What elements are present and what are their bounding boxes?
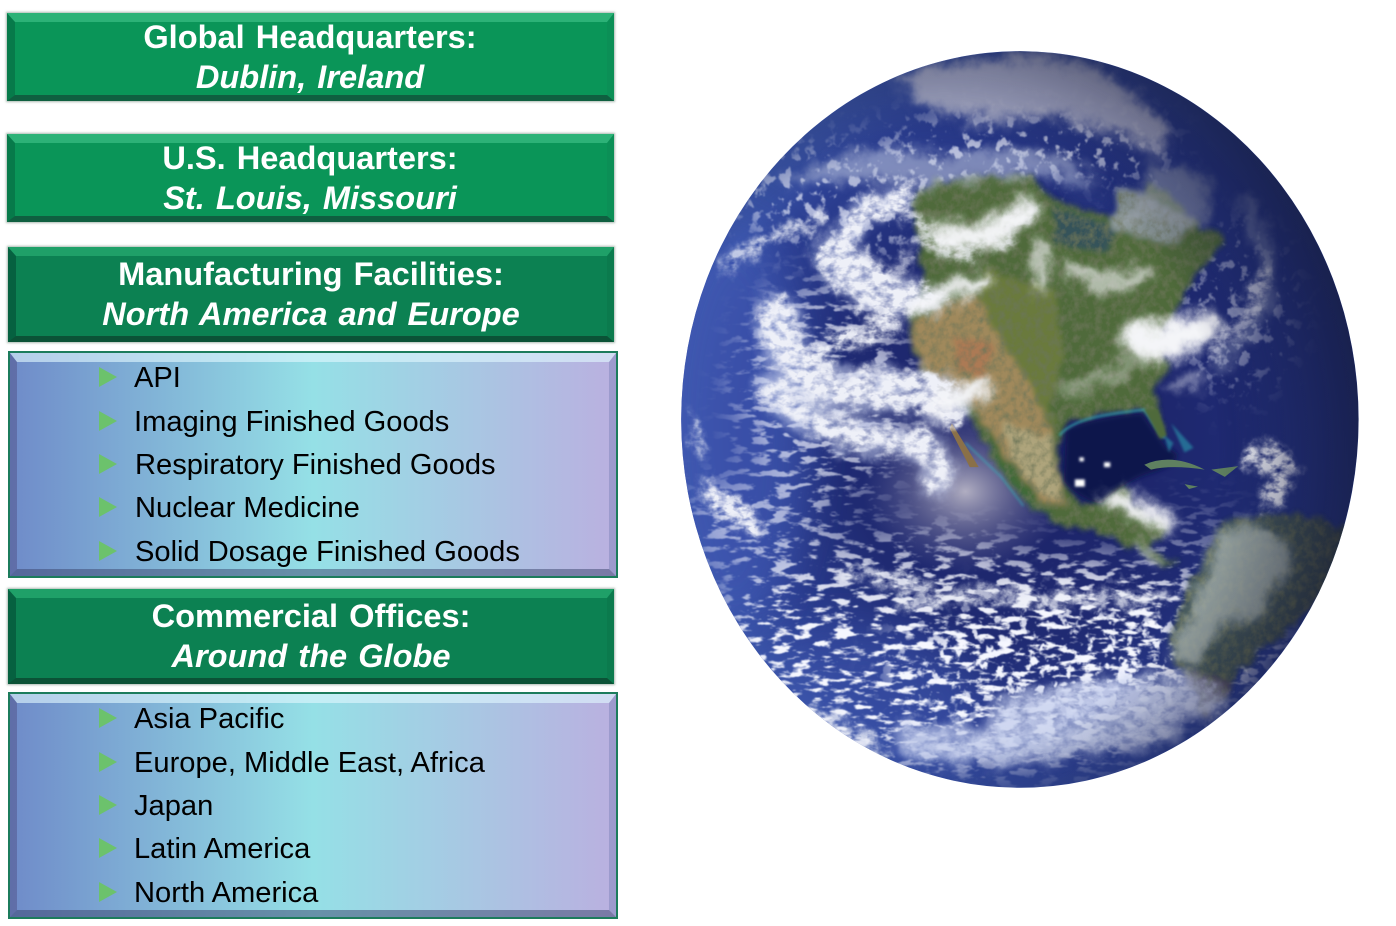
list item: Japan: Japan bbox=[134, 790, 213, 822]
box: U.S. headquarters bbox=[7, 134, 614, 222]
heading: commercial offices: Commercial Offices: bbox=[152, 597, 470, 634]
baja california bbox=[950, 424, 979, 468]
list item: respiratory: Respiratory Finished Goods bbox=[135, 449, 496, 481]
soft swirl underlayer bbox=[773, 200, 1202, 747]
south america clouds bbox=[1169, 521, 1296, 672]
icon: globe showing the Americas bbox=[681, 51, 1359, 788]
box: global headquarters bbox=[7, 13, 614, 101]
list item: imaging: Imaging Finished Goods bbox=[134, 406, 449, 438]
heading: U.S. headquarters: U.S. Headquarters: bbox=[162, 139, 458, 176]
gulf coast glow bbox=[1059, 410, 1164, 438]
hudson bay bbox=[1055, 171, 1113, 210]
list item: solid dosage: Solid Dosage Finished Goods bbox=[135, 536, 520, 568]
list item: EMEA: Europe, Middle East, Africa bbox=[134, 747, 485, 779]
list item: North America: North America bbox=[134, 877, 318, 909]
panel: commercial list bbox=[8, 692, 618, 919]
south america bbox=[1167, 514, 1350, 721]
list item: API bbox=[99, 362, 181, 394]
florida bbox=[1144, 409, 1167, 439]
list item: API: API bbox=[134, 362, 181, 394]
list item: Latin America: Latin America bbox=[134, 833, 310, 865]
heading: U.S. headquarters bbox=[162, 139, 458, 216]
speckled clouds bbox=[687, 252, 1298, 788]
list item: nuclear medicine: Nuclear Medicine bbox=[135, 492, 360, 524]
panel: manufacturing list bbox=[8, 351, 618, 578]
heading: global headquarters: Dublin, Ireland bbox=[196, 58, 424, 95]
sun glint bbox=[872, 420, 1048, 566]
heading: manufacturing facilities: Manufacturing Facilities: bbox=[118, 255, 504, 292]
ocean bbox=[670, 39, 1368, 798]
heading: manufacturing facilities: North America and Europe bbox=[102, 295, 520, 332]
gulf stars of cloud bbox=[1075, 458, 1110, 487]
storm swirl clouds bbox=[692, 200, 1281, 747]
heading: commercial offices bbox=[152, 597, 470, 674]
limb light and terminator shading bbox=[681, 52, 1359, 788]
gulf of mexico bbox=[1064, 413, 1177, 504]
caribbean islands bbox=[1144, 460, 1238, 489]
list item: Japan bbox=[99, 790, 213, 822]
heading: global headquarters: Global Headquarters: bbox=[143, 18, 477, 55]
list item: Asia Pacific: Asia Pacific bbox=[134, 703, 284, 735]
north america bbox=[907, 176, 1225, 570]
box: manufacturing facilities bbox=[8, 247, 614, 342]
heading: global headquarters bbox=[143, 18, 477, 95]
polar veil bbox=[782, 58, 1269, 370]
box: commercial offices bbox=[8, 589, 614, 684]
heading: commercial offices: Around the Globe bbox=[171, 637, 451, 674]
heading: U.S. headquarters: St. Louis, Missouri bbox=[163, 179, 457, 216]
heading: manufacturing facilities bbox=[102, 255, 520, 332]
bright land clouds bbox=[912, 210, 1202, 562]
